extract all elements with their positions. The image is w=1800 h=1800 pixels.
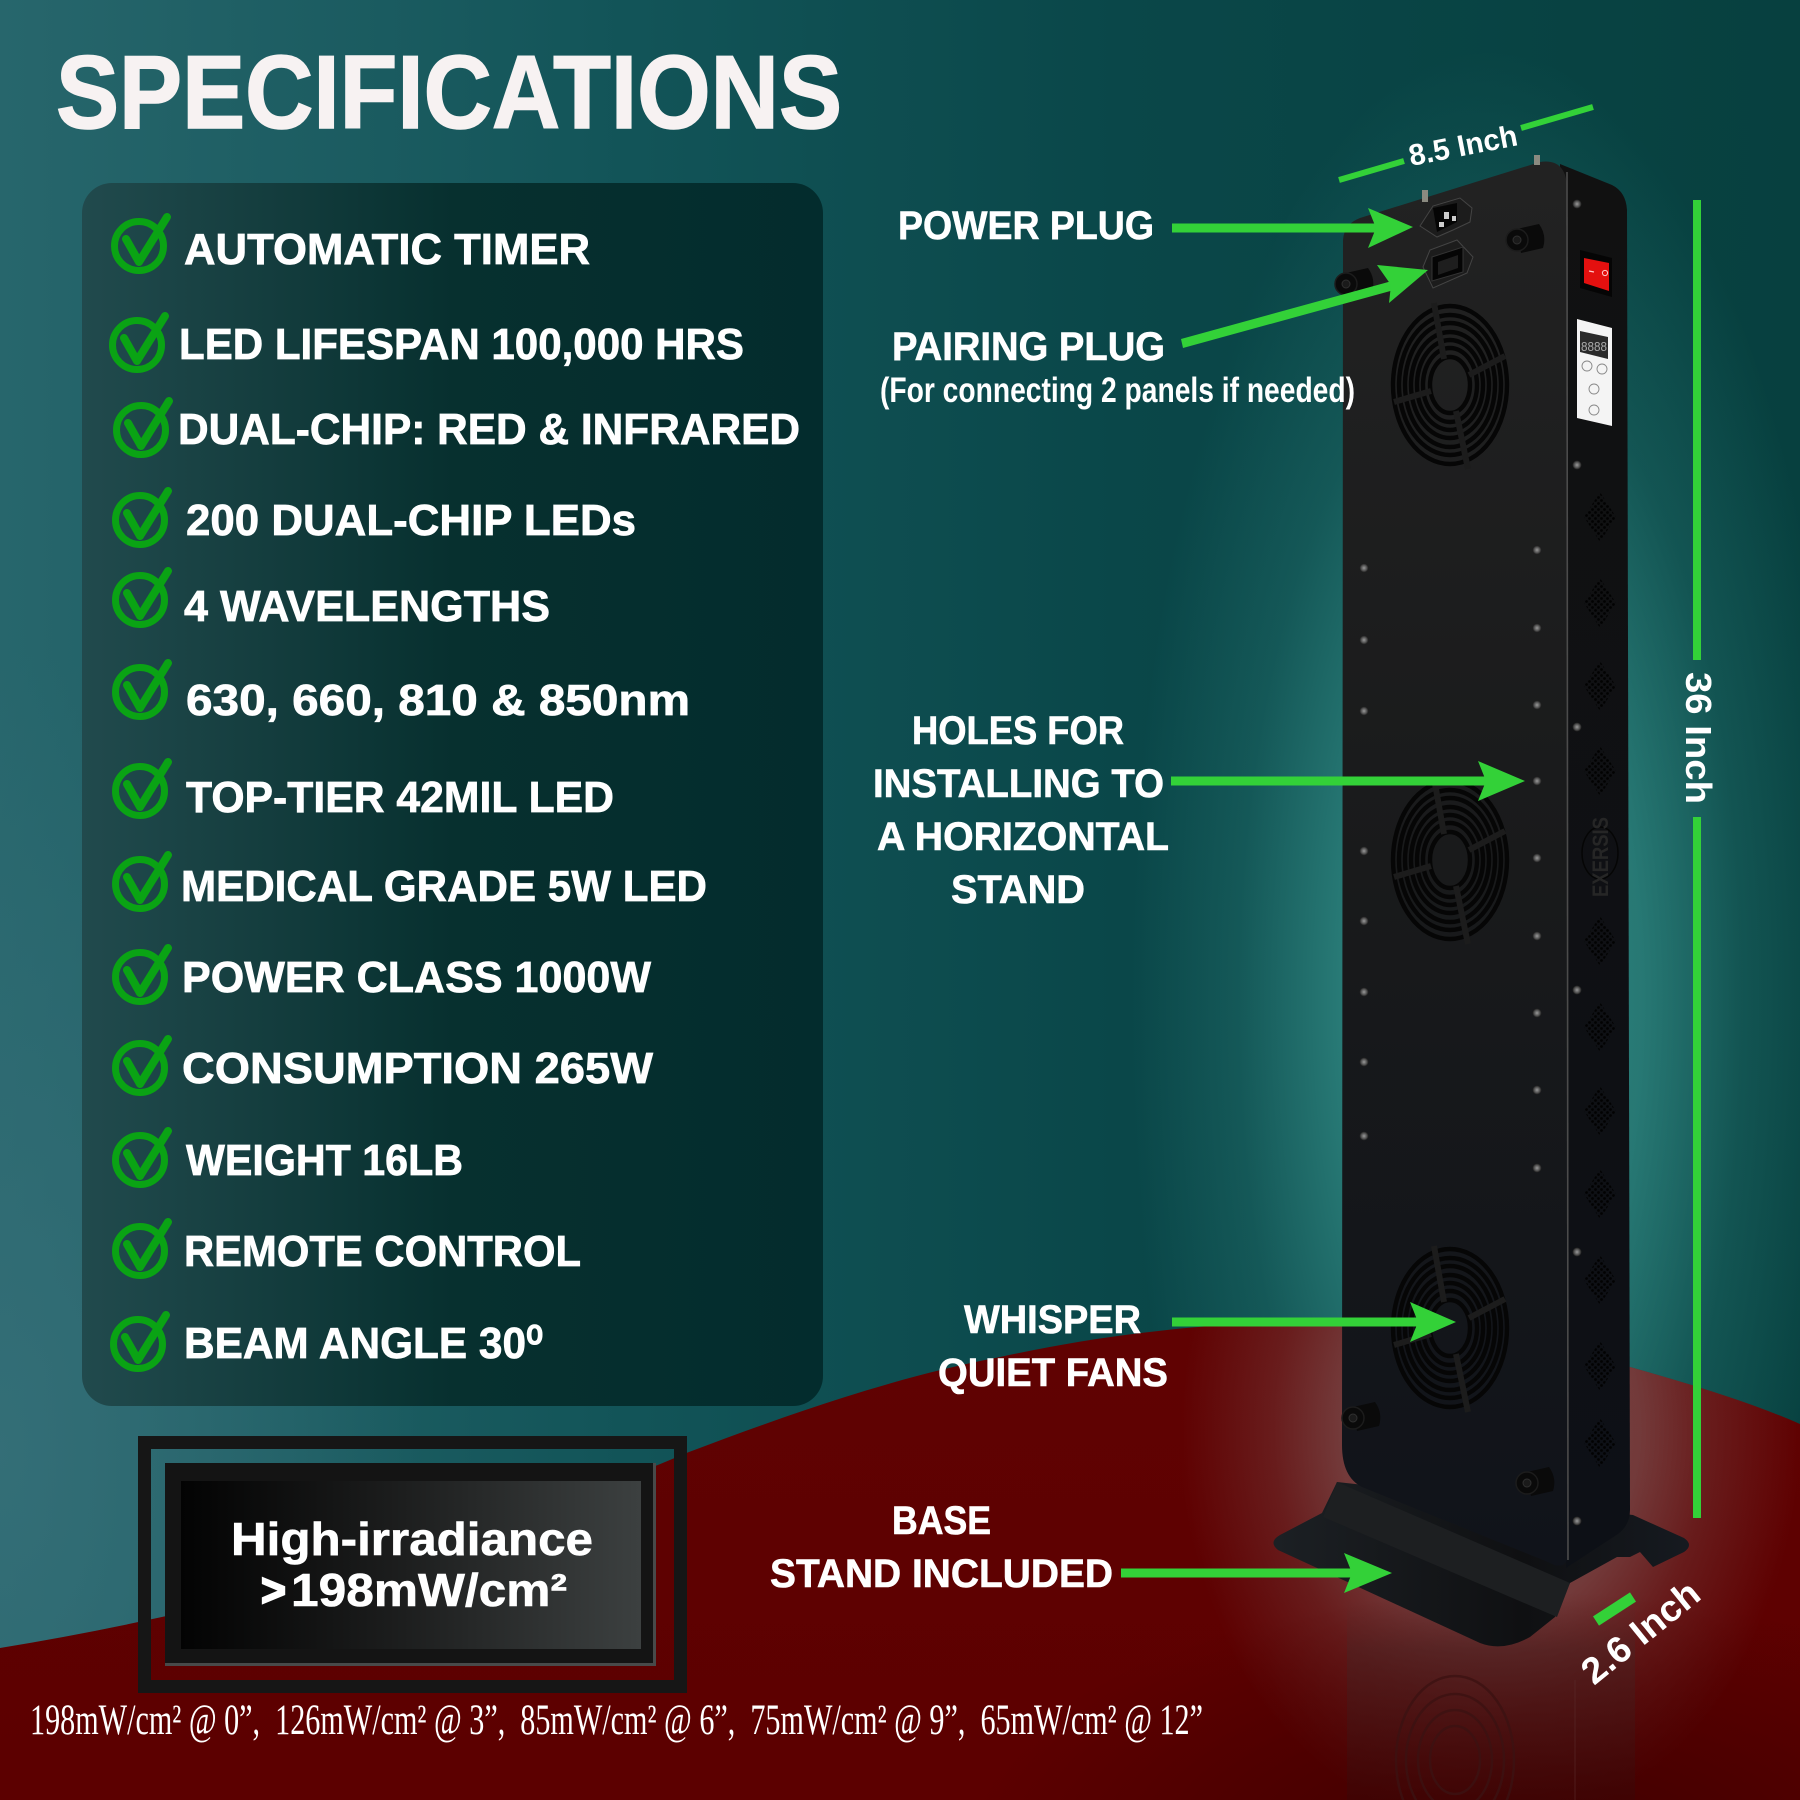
side logo: EXERSIS <box>1588 817 1613 897</box>
irradiance by distance line: 198mW/cm² @ 0”, 126mW/cm² @ 3”, 85mW/cm² @ 6”, 75mW/cm² @ 9”, 65mW/cm² @ 12” <box>30 1697 1203 1744</box>
background: dark red wave <box>0 1322 1800 1800</box>
spec item: medical grade: MEDICAL GRADE 5W LED <box>181 862 707 911</box>
callout box: high irradiance <box>144 1442 680 1686</box>
callout: pairing plug: (For connecting 2 panels if needed) <box>880 371 1355 410</box>
callout: base stand included <box>770 1499 1113 1596</box>
callout box: high irradiance: > <box>261 1564 286 1616</box>
callout: holes for horizontal stand <box>873 709 1169 912</box>
dimension: height 36 inch: 36 Inch <box>1678 672 1719 804</box>
callout box: high irradiance: 198mW/cm² <box>291 1564 567 1616</box>
title: SPECIFICATIONS <box>56 35 842 151</box>
callout: power plug: POWER PLUG <box>898 204 1154 248</box>
spec item: nanometres: 630, 660, 810 & 850nm <box>186 676 690 725</box>
spec item: weight: WEIGHT 16LB <box>186 1136 463 1185</box>
spec item: LED lifespan: LED LIFESPAN 100,000 HRS <box>179 320 744 369</box>
dimension: width 8.5 inch <box>1339 107 1593 180</box>
spec item: top-tier LED: TOP-TIER 42MIL LED <box>186 773 614 822</box>
product: LED panel on base stand <box>1273 155 1689 1646</box>
dimension: width 8.5 inch: 8.5 Inch <box>1406 119 1520 173</box>
spec item: wavelengths: 4 WAVELENGTHS <box>184 582 550 631</box>
arrow: power plug <box>1172 208 1413 248</box>
arrow: installation holes <box>1171 761 1525 801</box>
callout: base stand included: STAND INCLUDED <box>770 1552 1113 1596</box>
callout box: high irradiance: High-irradiance <box>231 1513 593 1565</box>
dimension: height 36 inch <box>1678 200 1719 1518</box>
spec item: top-tier LED <box>116 762 614 822</box>
panel: specification list <box>82 183 823 1406</box>
mounting standoffs <box>1335 224 1554 1496</box>
base stand <box>1273 1482 1689 1646</box>
spec item: consumption: CONSUMPTION 265W <box>182 1044 653 1093</box>
spec item: 200 LEDs: 200 DUAL-CHIP LEDs <box>186 496 636 545</box>
spec item: power class: POWER CLASS 1000W <box>182 953 651 1002</box>
dimension: depth 2.6 inch: 2.6 Inch <box>1573 1572 1708 1692</box>
callout: whisper quiet fans: WHISPER <box>964 1298 1141 1342</box>
spec item: dual-chip: DUAL-CHIP: RED & INFRARED <box>178 405 800 454</box>
spec item: remote control: REMOTE CONTROL <box>184 1227 581 1276</box>
product reflection <box>1347 1600 1635 1800</box>
arrow: base stand <box>1121 1553 1392 1593</box>
callout: holes for horizontal stand: INSTALLING TO <box>873 762 1164 806</box>
panel side <box>1560 164 1630 1568</box>
callout: holes for horizontal stand: A HORIZONTAL <box>877 815 1169 859</box>
top pins <box>1422 155 1540 202</box>
callout: whisper quiet fans: QUIET FANS <box>938 1351 1168 1395</box>
callout: holes for horizontal stand: STAND <box>951 868 1085 912</box>
callout: whisper quiet fans <box>938 1298 1168 1395</box>
callout: base stand included: BASE <box>892 1499 991 1543</box>
side logo <box>1582 817 1618 897</box>
spec item: beam angle: BEAM ANGLE 30⁰ <box>184 1319 543 1368</box>
pairing plug socket <box>1423 240 1473 288</box>
red power switch <box>1580 250 1612 297</box>
fan grilles <box>1393 303 1507 1412</box>
white control panel: 8888 <box>1581 339 1607 354</box>
panel front face <box>1342 162 1568 1566</box>
spec item: nanometres <box>116 663 690 725</box>
spec item: wavelengths <box>116 571 550 631</box>
callout: pairing plug <box>880 325 1355 410</box>
white control panel <box>1577 319 1612 426</box>
callout: holes for horizontal stand: HOLES FOR <box>912 709 1124 753</box>
spec item: automatic timer: AUTOMATIC TIMER <box>184 225 590 274</box>
installation holes <box>1360 200 1582 1526</box>
power plug socket <box>1420 198 1472 237</box>
arrow: pairing plug <box>1181 265 1428 348</box>
arrow: whisper fans <box>1172 1302 1456 1342</box>
spec item: weight <box>116 1131 463 1185</box>
side vent diamonds <box>1584 492 1616 1468</box>
callout: pairing plug: PAIRING PLUG <box>892 325 1165 369</box>
